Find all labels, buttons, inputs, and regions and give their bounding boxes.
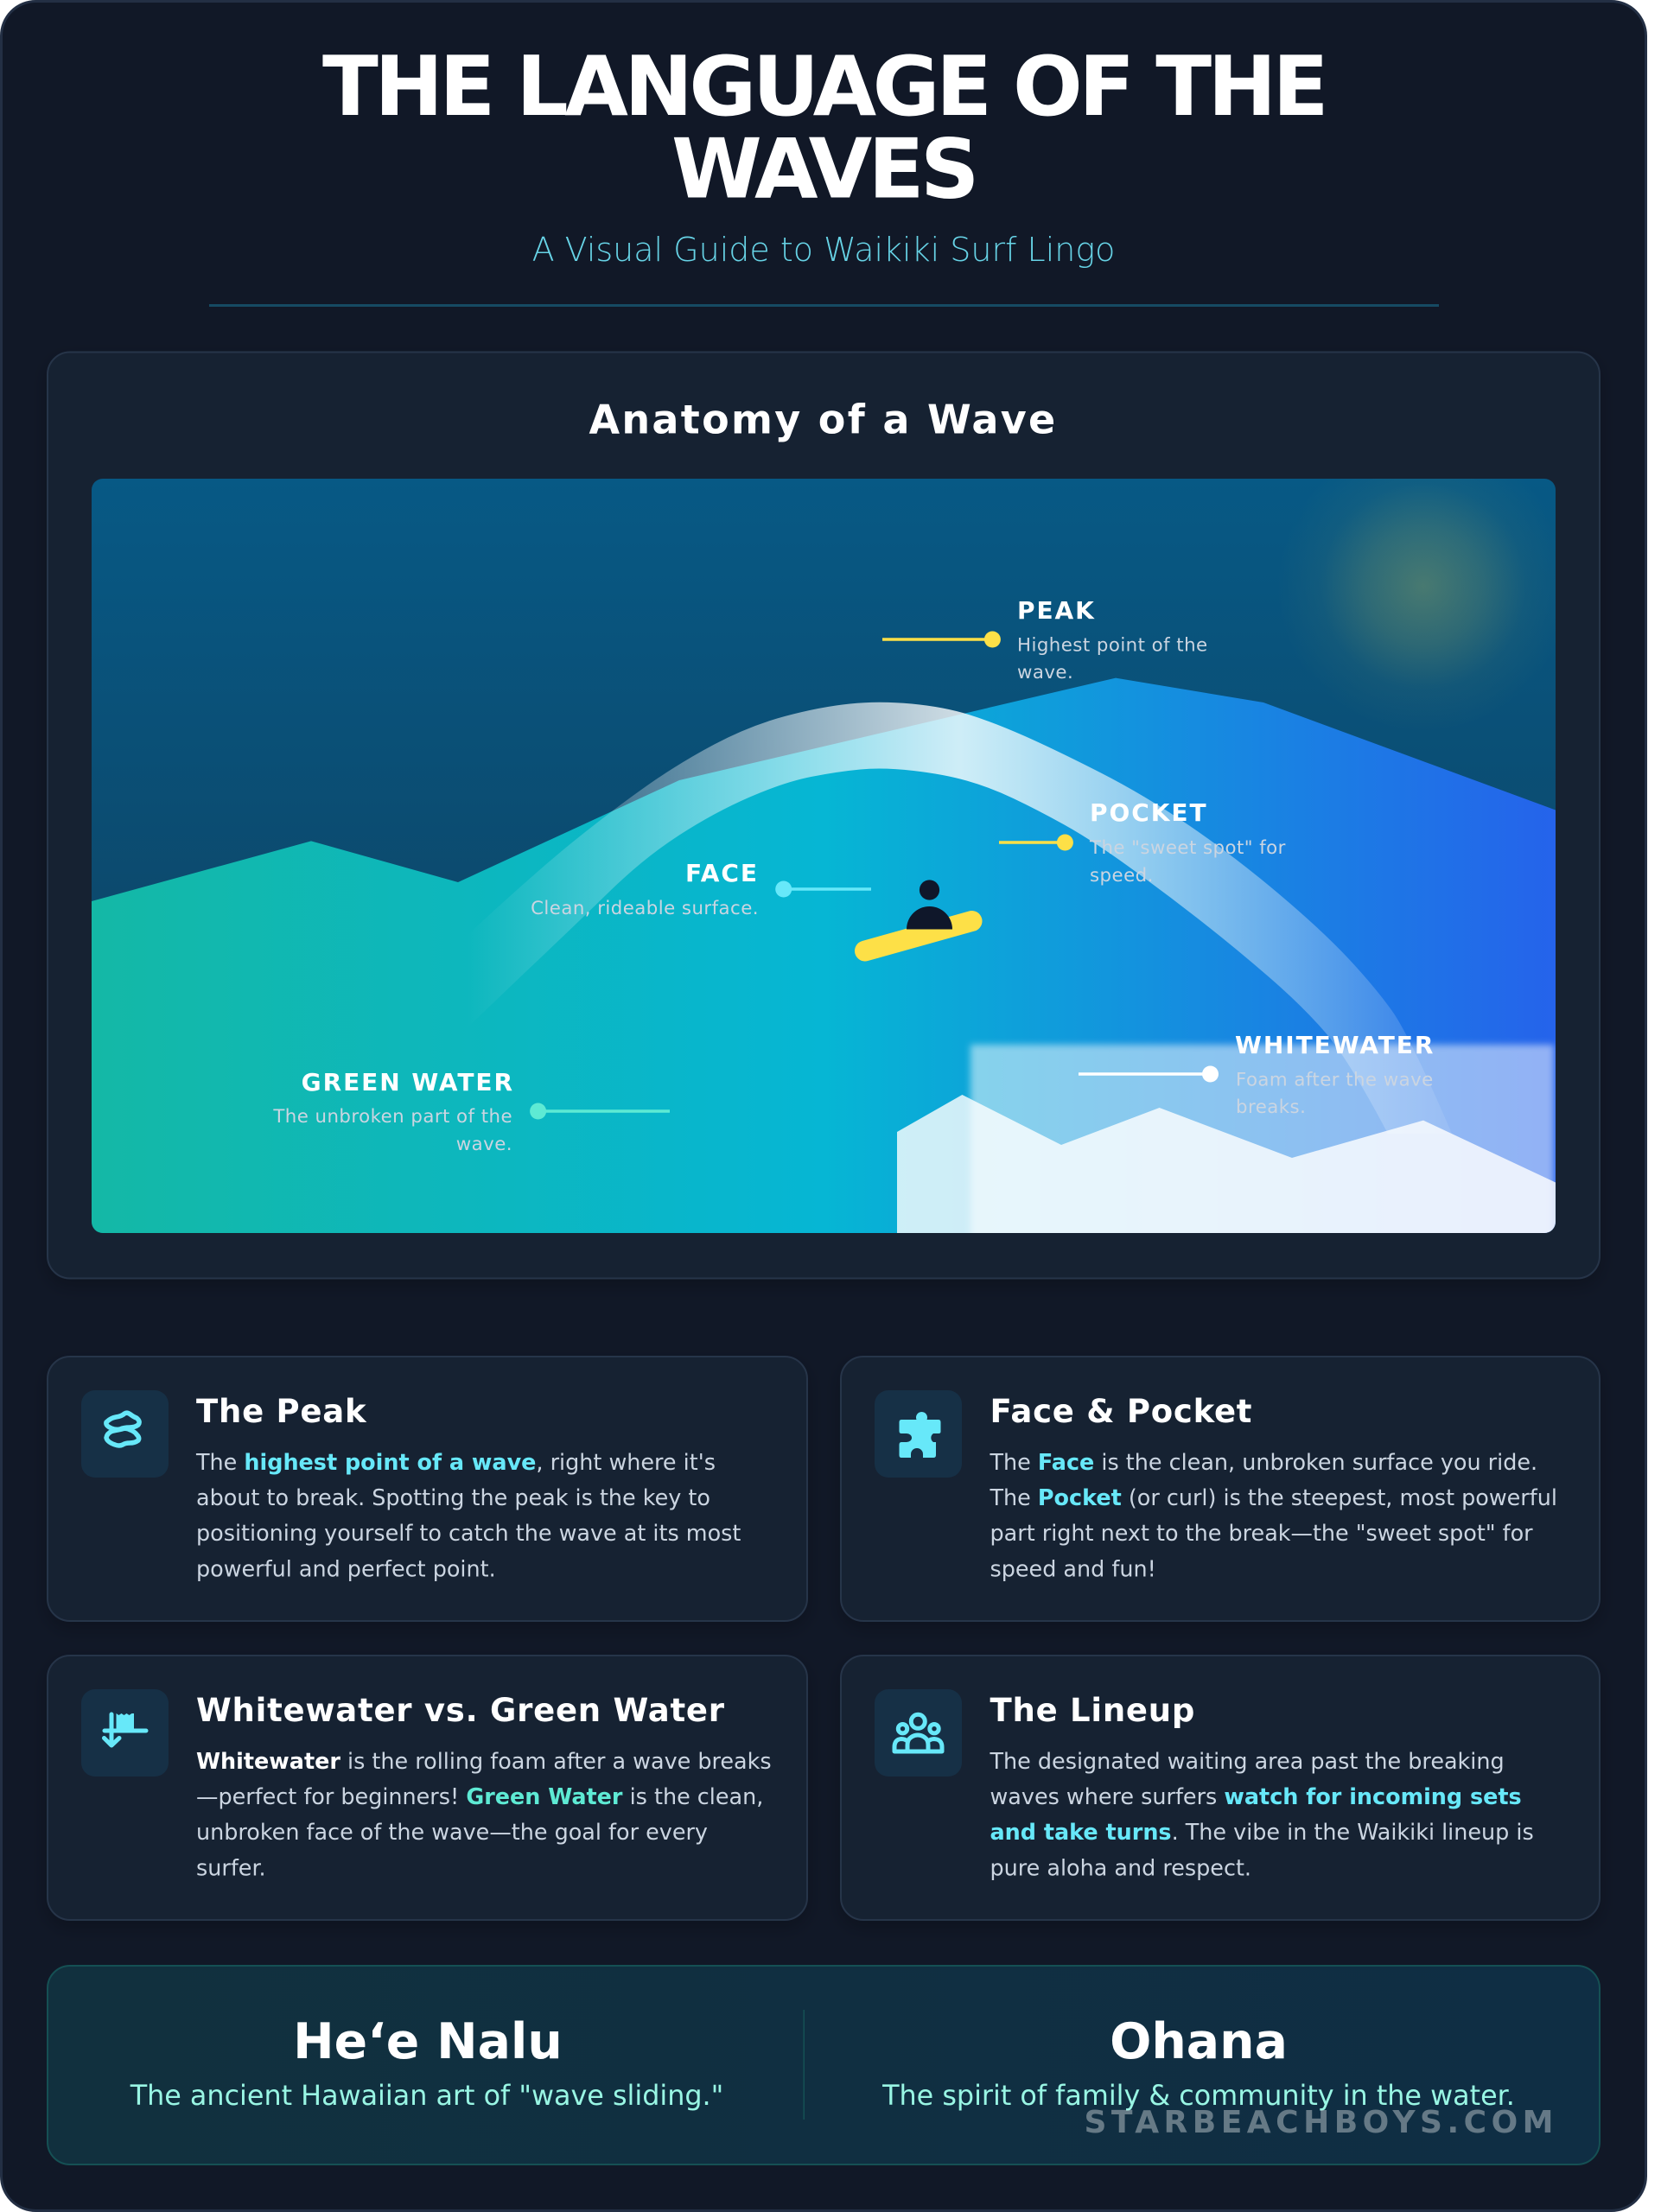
label: pocket: speed. <box>1090 865 1154 887</box>
icon: wave layers <box>81 1390 169 1478</box>
card body: part right next to the break—the "sweet spot" for <box>990 1521 1533 1547</box>
label: face: Clean, rideable surface. <box>531 898 759 919</box>
label: green water <box>273 1073 670 1151</box>
card body: The <box>989 1485 1038 1511</box>
card body: about to break. Spotting the peak is the key to <box>196 1485 710 1511</box>
card: whitewater vs green water <box>48 1656 807 1920</box>
label: pocket <box>999 798 1286 887</box>
card body: The <box>989 1450 1038 1476</box>
surfer <box>865 880 971 950</box>
surfboard <box>865 921 971 950</box>
label: peak <box>882 601 1206 679</box>
card body: positioning yourself to catch the wave at its most <box>196 1521 741 1547</box>
card body: speed and fun! <box>990 1557 1156 1583</box>
card body: surfer. <box>196 1856 266 1882</box>
label: face <box>531 864 871 916</box>
card body: watch for incoming sets <box>1224 1784 1522 1810</box>
card heading: The Peak <box>196 1393 367 1430</box>
term: ohana: Ohana <box>1110 2013 1288 2070</box>
card body: Pocket (or curl) is the steepest, most powerful <box>1038 1485 1557 1511</box>
title: THE LANGUAGE OF THE <box>322 40 1325 135</box>
whitewater foam <box>897 1095 1556 1233</box>
watermark: STARBEACHBOYS.COM <box>1084 2105 1558 2140</box>
panel: anatomy of a wave <box>48 353 1600 1279</box>
sun glow <box>1314 479 1532 695</box>
label: green water: GREEN WATER <box>302 1068 514 1096</box>
label: face: FACE <box>685 859 759 887</box>
card: the lineup <box>841 1656 1600 1920</box>
heading: anatomy of a wave: Anatomy of a Wave <box>589 396 1058 442</box>
label: pocket: POCKET <box>1090 798 1208 827</box>
card body: The designated waiting area past the breaking <box>989 1749 1505 1775</box>
card body: Face is the clean, unbroken surface you ride. <box>1038 1450 1537 1476</box>
wave diagram <box>92 439 1570 1252</box>
card heading: Whitewater vs. Green Water <box>196 1692 725 1729</box>
icon: whitewater drop <box>81 1689 169 1777</box>
sky <box>92 479 1556 1233</box>
card body: waves where surfers <box>990 1784 1224 1810</box>
card: the peak <box>48 1357 807 1621</box>
card body: and take turns <box>990 1820 1172 1846</box>
banner: hawaiian terms <box>48 1966 1600 2164</box>
whitewater foam haze <box>971 1045 1554 1252</box>
icon: puzzle piece <box>875 1390 962 1478</box>
subtitle: A Visual Guide to Waikiki Surf Lingo <box>532 231 1115 269</box>
card body: Whitewater <box>196 1749 340 1775</box>
label: green water: The unbroken part of the <box>272 1106 512 1128</box>
card body: is the rolling foam after a wave breaks <box>340 1749 772 1775</box>
card body: unbroken face of the wave—the goal for every <box>196 1820 708 1846</box>
card body: pure aloha and respect. <box>990 1856 1251 1882</box>
label: whitewater: Foam after the wave <box>1236 1070 1434 1090</box>
surfer body <box>907 906 952 930</box>
surfer head <box>920 880 939 900</box>
label: pocket: The "sweet spot" for <box>1089 837 1286 859</box>
term: ohana <box>881 2013 1515 2112</box>
label: whitewater: WHITEWATER <box>1235 1031 1435 1059</box>
card body: Green Water is the clean, <box>466 1784 763 1810</box>
label: whitewater: breaks. <box>1236 1096 1306 1118</box>
breaking crest band <box>467 702 1452 1134</box>
card body: The <box>195 1450 244 1476</box>
term: ohana: The spirit of family & community in the water. <box>881 2080 1515 2112</box>
label: peak: wave. <box>1017 662 1073 683</box>
card heading: The Lineup <box>990 1692 1195 1729</box>
term: he'e nalu <box>130 2013 723 2112</box>
card: face and pocket <box>841 1357 1600 1621</box>
card heading: Face & Pocket <box>990 1393 1252 1430</box>
card body: —perfect for beginners! <box>196 1784 466 1810</box>
label: whitewater <box>1079 1036 1433 1113</box>
card body: highest point of a wave, right where it's <box>244 1450 716 1476</box>
label: green water: wave. <box>456 1134 512 1155</box>
card body: powerful and perfect point. <box>196 1557 496 1583</box>
term: he'e nalu: Heʻe Nalu <box>293 2013 563 2070</box>
title: WAVES <box>671 123 976 218</box>
icon: group of surfers <box>875 1689 962 1777</box>
wave body <box>92 678 1556 1233</box>
term: he'e nalu: The ancient Hawaiian art of "wave sliding." <box>130 2080 723 2112</box>
card body: . The vibe in the Waikiki lineup is <box>1172 1820 1534 1846</box>
label: peak: Highest point of the <box>1017 634 1208 657</box>
label: peak: PEAK <box>1017 596 1096 625</box>
